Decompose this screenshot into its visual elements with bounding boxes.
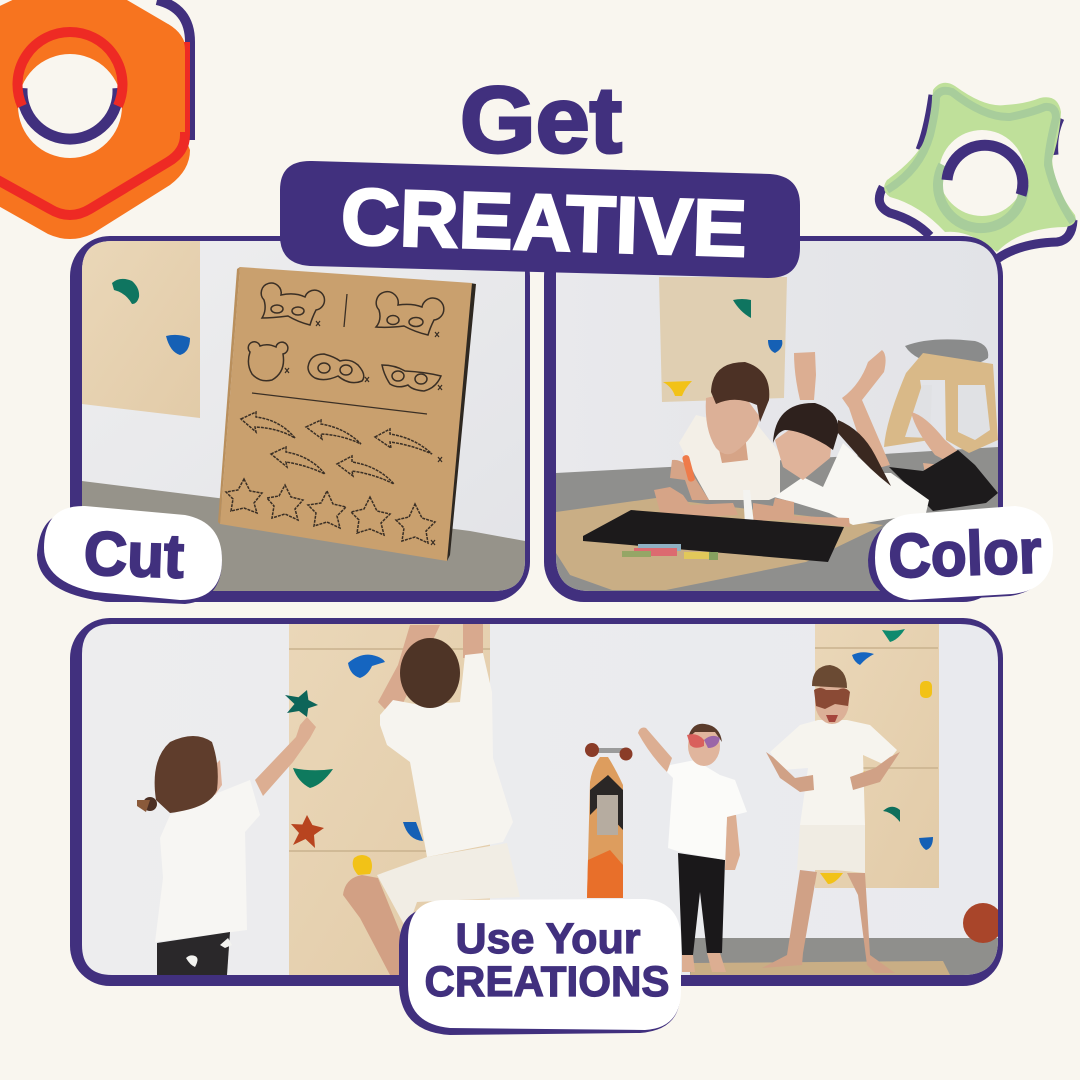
green star hold <box>285 690 318 717</box>
bear mask 2 <box>376 292 444 335</box>
teddy face <box>248 342 288 381</box>
skateboard <box>585 743 632 898</box>
climbing hold: green <box>112 279 139 304</box>
basketball <box>963 903 1003 943</box>
label: Color: Color <box>887 517 1043 592</box>
chalk sticks <box>622 544 718 560</box>
wall <box>82 624 998 975</box>
scissor marks <box>285 321 442 545</box>
panel: color photo <box>544 236 1003 602</box>
label: Cut: Cut <box>83 519 185 592</box>
bear mask <box>814 688 850 709</box>
rug <box>556 498 883 590</box>
climbing holds <box>733 299 751 318</box>
wall <box>82 241 525 591</box>
stars <box>226 479 262 513</box>
label: Use Your CREATIONS: CREATIONS <box>424 958 670 1006</box>
girl left <box>137 717 316 975</box>
climbing hold: blue <box>166 335 190 355</box>
holds right <box>820 629 933 884</box>
heading badge: CREATIVE <box>280 161 800 278</box>
superhero mask 1 <box>308 354 364 383</box>
chalkboard <box>583 510 844 562</box>
climbing board <box>659 277 787 402</box>
tall boy <box>762 665 900 973</box>
floor <box>690 938 998 975</box>
arrows <box>241 412 295 438</box>
red star hold <box>291 815 324 848</box>
cardboard sheet <box>218 267 476 561</box>
leggings <box>889 450 998 511</box>
superhero mask 2 <box>382 365 441 391</box>
climbing board left <box>289 624 490 975</box>
label: Cut <box>37 506 222 604</box>
girl's raised legs <box>794 350 957 470</box>
boy climbing <box>343 624 520 975</box>
icon: green gear ring <box>879 83 1076 259</box>
panel: use your creations photo <box>70 618 1003 986</box>
stool <box>884 339 998 453</box>
climbing board right <box>815 624 939 888</box>
heading badge: CREATIVE: CREATIVE <box>340 172 748 273</box>
label: Color <box>868 506 1053 602</box>
floor <box>82 481 525 591</box>
panel: cut photo <box>70 236 530 602</box>
label: Use Your CREATIONS: Use Your <box>456 915 641 963</box>
holds left <box>285 655 423 875</box>
icon: orange hexagon nut <box>0 0 190 239</box>
climbing board <box>82 241 200 418</box>
label: Use Your CREATIONS <box>399 899 681 1035</box>
floor <box>556 447 998 591</box>
paper mask <box>687 734 704 748</box>
boy <box>654 362 780 518</box>
small girl <box>638 724 747 972</box>
bear mask 1 <box>261 283 325 325</box>
wall <box>556 241 998 591</box>
girl <box>743 403 929 527</box>
divider lines <box>252 294 427 414</box>
heading: Get: Get <box>460 67 622 172</box>
